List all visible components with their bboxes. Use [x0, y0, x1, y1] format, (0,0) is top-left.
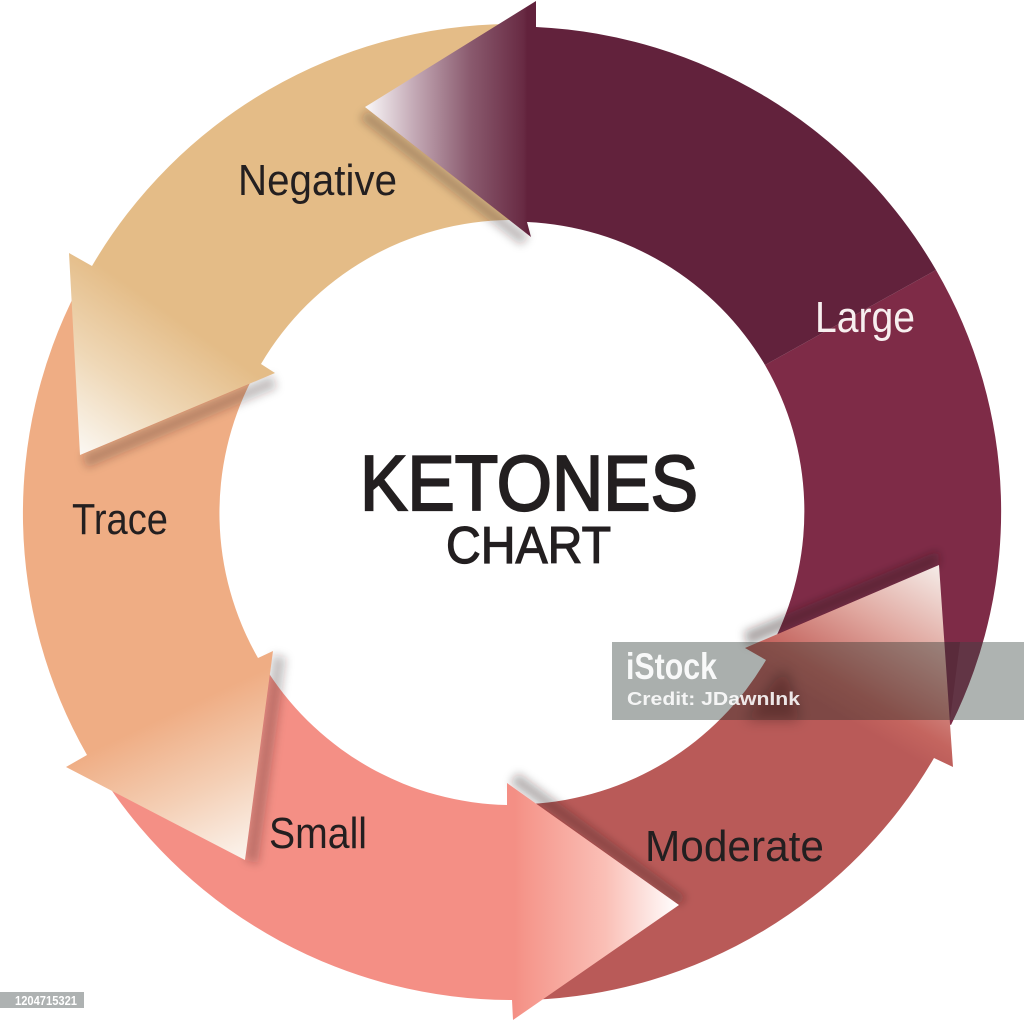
label: trace: Trace	[72, 495, 168, 544]
watermark: istock logo: iStock	[626, 646, 717, 687]
label: small: Small	[269, 809, 367, 858]
segment: trace arrow	[23, 290, 286, 864]
segment: very large arrow	[360, 1, 936, 365]
title	[360, 439, 698, 575]
segment: small arrow	[104, 672, 686, 1020]
watermark: credit: Credit: JDawnInk	[627, 689, 801, 709]
image id badge: 1204715321	[15, 994, 77, 1008]
heading: ketones: KETONES	[360, 439, 698, 527]
label: moderate: Moderate	[645, 822, 824, 871]
segment: negative arrow	[69, 24, 510, 468]
segment: large	[765, 270, 1001, 725]
segment labels	[72, 156, 915, 871]
watermark band	[612, 642, 1024, 720]
segment: moderate arrow	[530, 551, 953, 1000]
heading: chart: CHART	[446, 517, 611, 575]
label: negative: Negative	[238, 156, 397, 205]
label: large: Large	[815, 293, 915, 342]
